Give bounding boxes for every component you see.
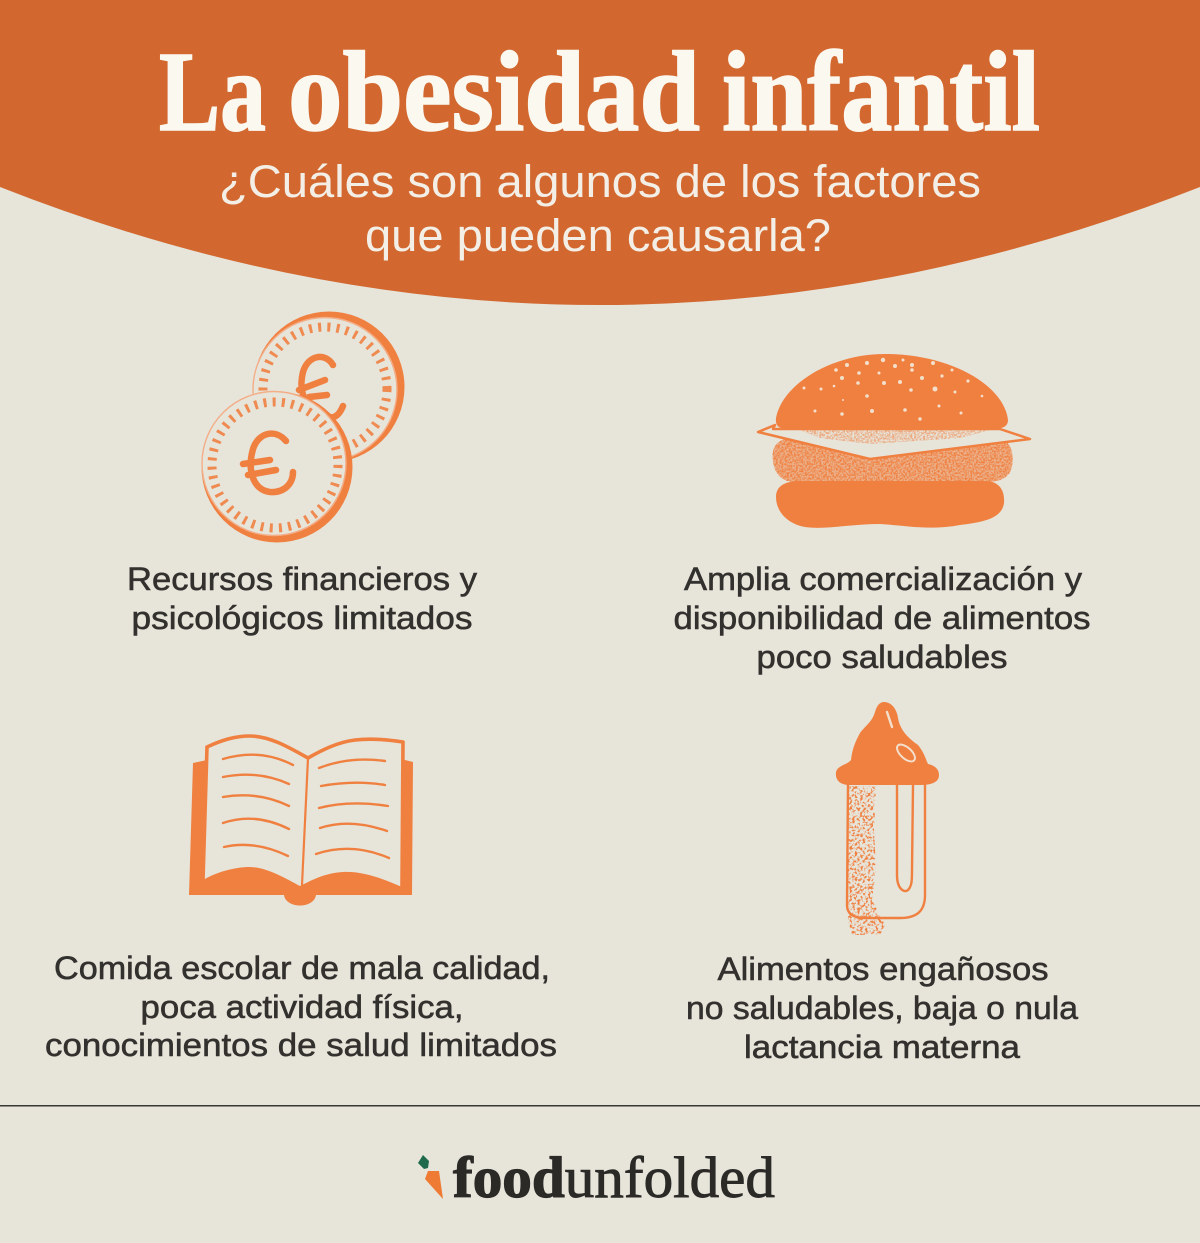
text: breastfeeding <box>686 951 1078 1065</box>
text: school meals: poca actividad física, <box>140 989 464 1025</box>
text: financial resources <box>127 561 477 636</box>
header banner <box>0 0 1200 305</box>
text: breastfeeding: Alimentos engañosos <box>718 951 1048 987</box>
wordmark: foodunfolded <box>453 1145 775 1210</box>
text: school meals: conocimientos de salud limitados <box>45 1027 557 1063</box>
text: food marketing <box>674 561 1090 675</box>
title <box>159 28 1040 155</box>
title: obesidad <box>288 28 700 155</box>
text: breastfeeding: no saludables, baja o nula <box>686 990 1078 1026</box>
logo: foodunfolded <box>418 1145 775 1210</box>
text: school meals <box>45 950 557 1063</box>
text: school meals: Comida escolar de mala calidad, <box>54 950 550 986</box>
title: La <box>159 28 266 155</box>
text: financial resources: psicológicos limitados <box>132 600 472 636</box>
icon: burger <box>758 354 1030 528</box>
subtitle <box>219 156 981 261</box>
text: breastfeeding: lactancia materna <box>744 1029 1020 1065</box>
icon: euro coins <box>202 312 404 542</box>
text: food marketing: Amplia comercialización y <box>684 561 1082 597</box>
icon: carrot <box>418 1155 443 1199</box>
icon: open book <box>189 736 413 906</box>
text: food marketing: poco saludables <box>756 639 1008 675</box>
title: infantil <box>722 28 1040 155</box>
icon: baby bottle <box>836 702 939 935</box>
text: financial resources: Recursos financieros y <box>127 561 477 597</box>
subtitle: ¿Cuáles son algunos de los factores <box>219 156 981 207</box>
subtitle: que pueden causarla? <box>365 210 831 261</box>
text: food marketing: disponibilidad de alimentos <box>674 600 1090 636</box>
